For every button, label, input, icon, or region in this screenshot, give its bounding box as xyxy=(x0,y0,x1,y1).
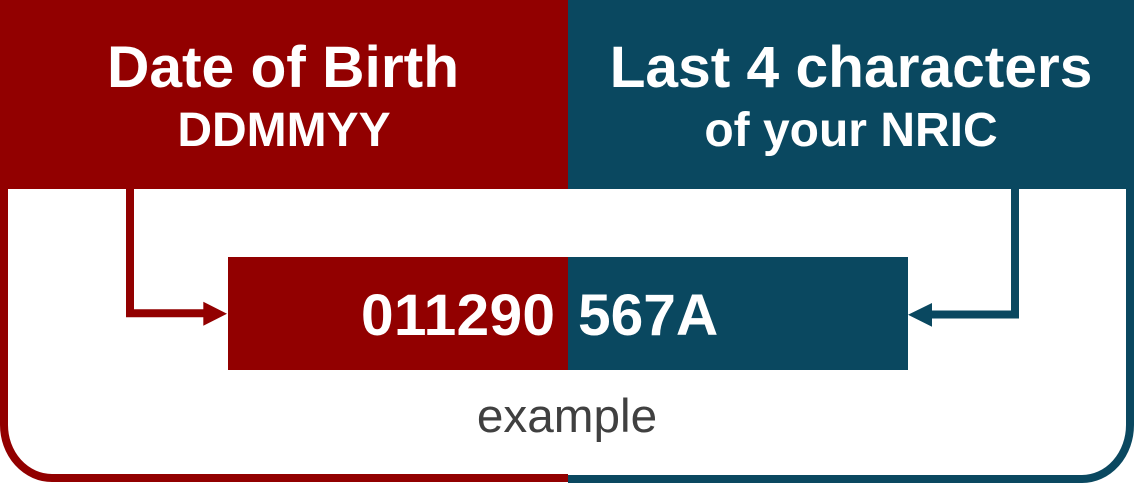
text: 011290: 011290 xyxy=(361,283,555,348)
panel: NRIC header xyxy=(568,0,1134,189)
left frame outline xyxy=(4,189,568,478)
caption: example: example xyxy=(477,390,657,443)
right frame outline xyxy=(568,189,1130,479)
panel: date of birth header xyxy=(0,0,568,189)
heading: date of birth: Date of Birth xyxy=(107,35,459,100)
subheading: DDMMYY: DDMMYY xyxy=(177,104,391,157)
heading: last 4 characters: Last 4 characters xyxy=(610,35,1092,100)
arrow: date of birth to example xyxy=(130,189,227,326)
text: 567A: 567A xyxy=(578,283,718,348)
example box: NRIC characters xyxy=(568,257,908,370)
arrow: NRIC to example xyxy=(908,189,1015,327)
example box: date of birth digits xyxy=(228,257,568,370)
subheading: of your NRIC: of your NRIC xyxy=(704,104,998,157)
